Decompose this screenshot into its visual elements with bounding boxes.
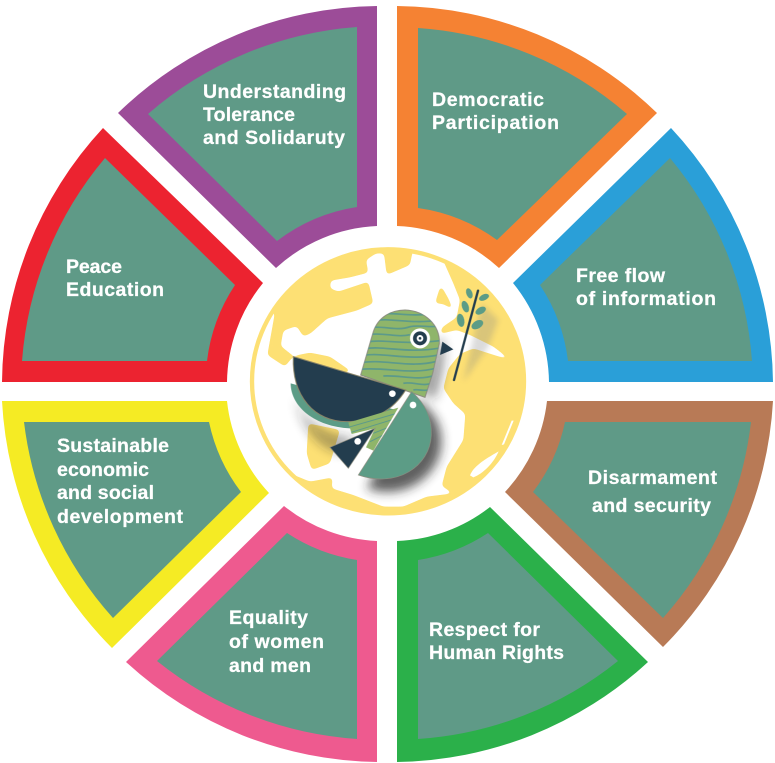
label: Equality	[229, 607, 308, 629]
bird shadow	[295, 337, 444, 492]
teal body	[358, 392, 431, 479]
segment: Sustainable economic and social development	[2, 401, 269, 648]
green border	[397, 507, 648, 762]
label: Democratic	[432, 89, 544, 111]
label: and security	[592, 495, 711, 517]
label	[66, 256, 164, 301]
globe ring	[252, 249, 524, 513]
label: Respect for	[429, 619, 540, 641]
label	[432, 89, 559, 134]
navy tail triangle	[330, 428, 375, 468]
segment: Democratic Participation	[397, 6, 657, 268]
segment: Free flow of information	[513, 128, 773, 382]
stem	[454, 291, 478, 380]
white patches on southern landmass	[470, 421, 514, 477]
green panel	[540, 158, 752, 361]
segment: Peace Education	[2, 128, 263, 382]
striped tail	[348, 408, 398, 451]
label: Sustainable	[57, 435, 169, 457]
label	[429, 619, 564, 664]
label: of information	[576, 288, 716, 310]
label: and men	[229, 655, 311, 677]
label: and Solidaruty	[203, 127, 345, 149]
label: Disarmament	[588, 467, 718, 489]
tail grain	[348, 413, 397, 442]
green panel	[24, 422, 241, 618]
branch shadow	[463, 303, 498, 382]
brown border	[505, 401, 773, 647]
green panel	[22, 158, 235, 361]
dove	[291, 310, 453, 479]
label	[57, 435, 184, 528]
segment: Equality of women and men	[126, 506, 377, 762]
label: of women	[229, 631, 324, 653]
label	[203, 81, 346, 149]
green panel	[148, 27, 357, 241]
label: development	[57, 506, 184, 528]
label	[588, 467, 718, 517]
white dots	[354, 390, 416, 445]
globe disc	[252, 249, 524, 513]
label: Free flow	[576, 265, 666, 287]
red border	[2, 128, 263, 382]
green panel	[418, 533, 618, 739]
beak	[440, 342, 453, 355]
teal back wing	[291, 383, 397, 428]
label: Peace	[66, 256, 122, 278]
label: economic	[57, 459, 149, 481]
segment: Disarmament and security	[505, 401, 773, 647]
segment: Understanding Tolerance and Solidaruty	[118, 6, 377, 268]
label: Tolerance	[203, 104, 295, 126]
head and neck	[361, 310, 439, 397]
label	[229, 607, 324, 677]
green panel	[533, 422, 751, 618]
blue border	[513, 128, 773, 382]
label: and social	[57, 482, 154, 504]
green panel	[157, 533, 357, 739]
green panel	[418, 28, 627, 240]
orange border	[397, 6, 657, 268]
yellow border	[2, 401, 269, 648]
olive branch	[454, 287, 490, 380]
label: Education	[66, 279, 164, 301]
eye	[410, 328, 430, 348]
leaves	[456, 287, 490, 331]
label: Participation	[432, 112, 559, 134]
continents	[268, 252, 522, 512]
label	[576, 265, 716, 310]
label: Human Rights	[429, 642, 564, 664]
globe	[250, 247, 526, 516]
centre emblem: dove on globe	[250, 247, 526, 516]
purple border	[118, 6, 377, 268]
pink border	[126, 506, 377, 762]
wood grain on head	[360, 313, 440, 390]
label: Understanding	[203, 81, 346, 103]
navy front wing	[293, 357, 406, 422]
segment: Respect for Human Rights	[397, 507, 648, 762]
